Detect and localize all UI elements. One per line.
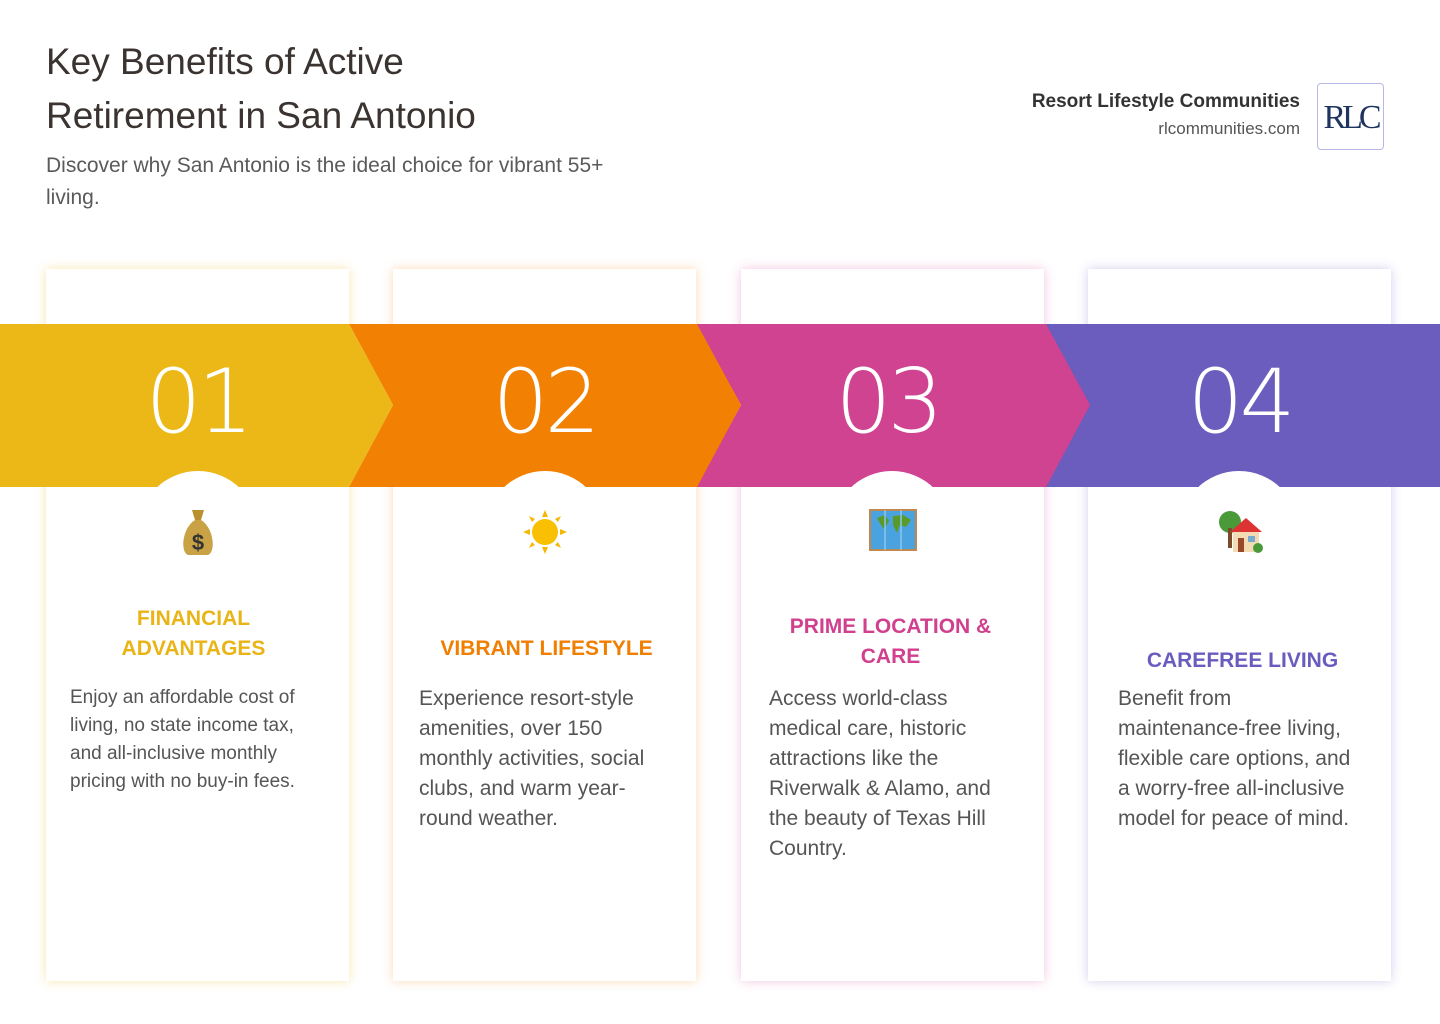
heading: financial advantages xyxy=(122,607,265,660)
brand name: Resort Lifestyle Communities xyxy=(1032,91,1300,112)
icon: money bag xyxy=(183,510,213,555)
card 3 xyxy=(741,269,1044,981)
title: Retirement in San Antonio xyxy=(46,95,476,136)
title: Key Benefits of Active xyxy=(46,41,404,82)
heading: vibrant lifestyle: VIBRANT LIFESTYLE xyxy=(440,637,653,660)
text: carefree: maintenance-free living, flexible care options, and a worry-free all-inclusive model for peace of mind. xyxy=(1118,717,1350,830)
brand block xyxy=(1032,83,1384,150)
heading: carefree living: CAREFREE LIVING xyxy=(1147,649,1338,672)
logo: RLC xyxy=(1323,99,1378,136)
icon: money bag: $ xyxy=(191,530,204,555)
card 4 xyxy=(1088,269,1391,981)
number 02: 02 xyxy=(492,350,596,453)
heading: prime location: PRIME LOCATION & xyxy=(790,615,991,638)
brand url: rlcommunities.com xyxy=(1158,119,1300,138)
number 03: 03 xyxy=(836,350,939,453)
heading: prime location: CARE xyxy=(861,645,920,668)
icon: house xyxy=(1219,511,1263,553)
text: carefree: Benefit from xyxy=(1118,687,1231,710)
heading: financial advantages: ADVANTAGES xyxy=(122,637,265,660)
number 04: 04 xyxy=(1188,350,1291,453)
icon: map xyxy=(869,509,917,551)
logo xyxy=(1317,83,1384,150)
text: prime location: Access world-class medical care, historic attractions like the Riverwalk & Alamo, and the beauty of Texas Hill Country. xyxy=(769,687,991,860)
heading: financial advantages: FINANCIAL xyxy=(137,607,250,630)
arrow band xyxy=(0,324,1440,487)
heading: prime location xyxy=(790,615,991,668)
subtitle: Discover why San Antonio is the ideal choice for vibrant 55+ living. xyxy=(46,154,603,209)
card 1 xyxy=(46,269,349,981)
icon: sun xyxy=(523,510,567,554)
number 01: 01 xyxy=(146,350,249,453)
card 2 xyxy=(393,269,696,981)
text: vibrant: Experience resort-style amenities, over 150 monthly activities, social clubs, and warm year-round weather. xyxy=(419,687,644,830)
title xyxy=(46,41,476,136)
text: financial: Enjoy an affordable cost of living, no state income tax, and all-inclusive monthly pricing with no buy-in fees. xyxy=(70,687,295,792)
